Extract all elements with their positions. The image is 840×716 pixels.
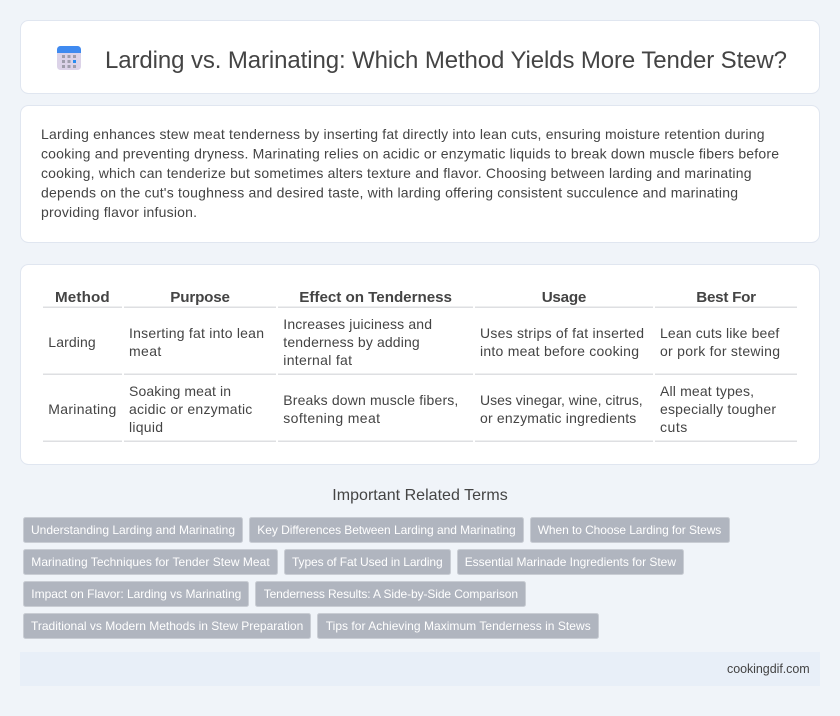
tag: [24, 518, 242, 542]
table row: Larding: Lean cuts like beef: [660, 325, 779, 341]
table header row: Purpose: [170, 289, 230, 306]
tag: Key Differences Between Larding and Marinating: [257, 523, 516, 537]
text block: intro: [41, 126, 779, 220]
table header row: Effect on Tenderness: [299, 289, 452, 306]
tag: Tenderness Results: A Side-by-Side Comparison: [264, 587, 518, 601]
panel: related term tags: [24, 518, 730, 638]
table row: Marinating: acidic or enzymatic: [129, 401, 252, 417]
table row: Larding: into meat before cooking: [480, 343, 639, 359]
text block: intro: cooking and preventing dryness. Marinating relies on acidic or enzymatic liquids to break down muscle fibers before: [41, 146, 779, 162]
tag: [530, 518, 730, 542]
tag: [24, 582, 248, 606]
table row: Larding: internal fat: [283, 352, 352, 368]
table row: Larding: Larding: [48, 334, 96, 350]
tag: Understanding Larding and Marinating: [31, 523, 235, 537]
tag: Essential Marinade Ingredients for Stew: [465, 555, 676, 569]
tag: Marinating Techniques for Tender Stew Meat: [31, 555, 270, 569]
text block: intro: depends on the cut's toughness and desired taste, with larding offering consistent succulence and marinating: [41, 184, 738, 200]
tag: When to Choose Larding for Stews: [538, 523, 721, 537]
panel: intro paragraph: [20, 106, 820, 242]
table row: Larding: [48, 316, 780, 368]
tag: [24, 550, 278, 574]
table row: Marinating: Breaks down muscle fibers,: [283, 392, 458, 408]
table header row: [55, 289, 756, 306]
table row: Larding: or pork for stewing: [660, 343, 780, 359]
tag: Impact on Flavor: Larding vs Marinating: [31, 587, 241, 601]
table row: Larding: Increases juiciness and: [283, 316, 432, 332]
table row: Marinating: Uses vinegar, wine, citrus,: [480, 392, 643, 408]
tag: Tips for Achieving Maximum Tenderness in Stews: [326, 619, 591, 633]
table row: Larding: tenderness by adding: [283, 334, 420, 350]
text block: intro: cooking, which can tenderize but sometimes alters texture and flavor. Choosing between larding and marinating: [41, 165, 752, 181]
table row: Marinating: [48, 383, 776, 435]
table row: Marinating: or enzymatic ingredients: [480, 410, 636, 426]
tag: Types of Fat Used in Larding: [292, 555, 443, 569]
table row: Larding: Uses strips of fat inserted: [480, 325, 644, 341]
tag: [458, 550, 684, 574]
tag: [24, 614, 310, 638]
text block: intro: Larding enhances stew meat tenderness by inserting fat directly into lean cuts, ensuring moisture retention during: [41, 126, 764, 142]
table row: Marinating: All meat types,: [660, 383, 754, 399]
table row: Marinating: especially tougher: [660, 401, 776, 417]
table row: Larding: Inserting fat into lean: [129, 325, 264, 341]
table header row: Best For: [696, 289, 756, 306]
tag: Traditional vs Modern Methods in Stew Preparation: [31, 619, 303, 633]
table row: Marinating: cuts: [660, 419, 687, 435]
tag: [284, 550, 450, 574]
tag: [256, 582, 526, 606]
footer bar: cookingdif.com: [727, 662, 810, 676]
tag: [318, 614, 598, 638]
table header row: Usage: [542, 289, 586, 306]
table row: Marinating: Marinating: [48, 401, 116, 417]
table row: Marinating: softening meat: [283, 410, 380, 426]
heading: related terms: Important Related Terms: [332, 487, 508, 504]
table row: Marinating: Soaking meat in: [129, 383, 231, 399]
icon: calendar: [57, 46, 81, 70]
table row: Marinating: liquid: [129, 419, 163, 435]
footer bar: [20, 652, 820, 686]
table row: Larding: meat: [129, 343, 161, 359]
title: Larding vs. Marinating: Which Method Yields More Tender Stew?: [105, 47, 787, 74]
panel: comparison table: [20, 264, 820, 464]
panel: title header: [20, 20, 820, 94]
tag: [250, 518, 524, 542]
table header row: Method: [55, 289, 110, 306]
text block: intro: providing flavor infusion.: [41, 204, 197, 220]
